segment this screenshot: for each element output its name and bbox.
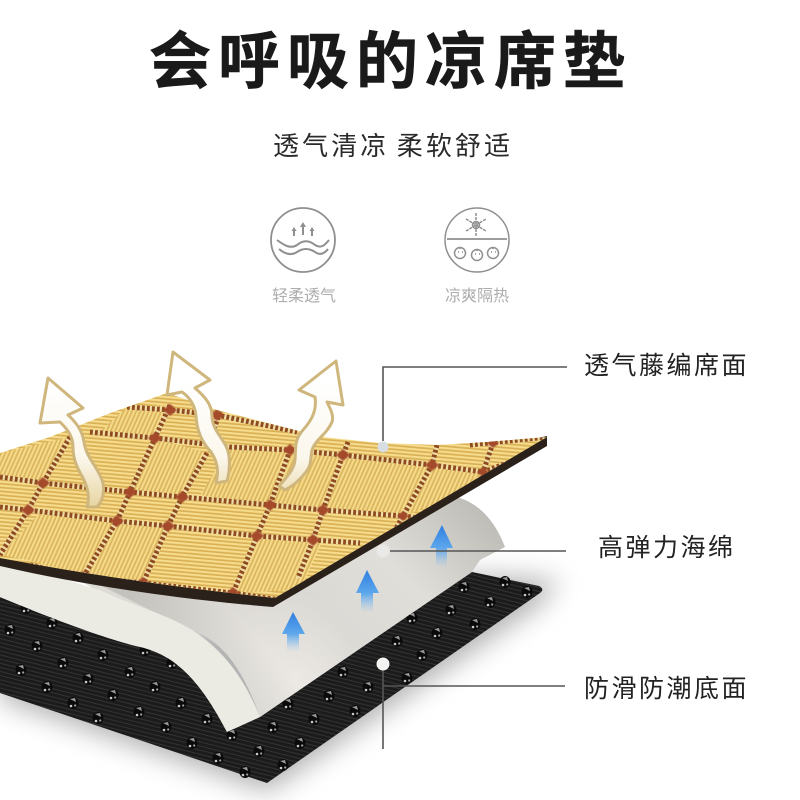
mat edge [0,436,547,607]
mat top surface [0,393,547,598]
blue arrow left [282,612,305,652]
icon label: breathable: 轻柔透气 [272,287,336,305]
callout text: 高弹力海绵 [598,534,736,562]
mat weave patches and plaid [0,404,547,600]
blue arrow right [430,525,453,568]
arrow: heat rising left [40,378,104,507]
arrow: heat rising middle [167,352,229,483]
base fabric [0,572,542,783]
icon label: heat insulation: 凉爽隔热 [445,287,509,305]
layer: anti-slip base [0,572,542,783]
icon: breathable waves [271,208,335,272]
layer: rattan mat [0,393,547,607]
blue arrow middle [356,570,379,613]
callout: foam [376,534,736,562]
shadow under mat [0,575,560,792]
foam body [60,498,505,717]
callout text: 防滑防潮底面 [584,675,749,703]
callout: rattan surface [378,352,749,452]
foam inner shade [100,560,380,717]
foam white edge [0,560,260,732]
base grip dots [4,576,532,778]
arrow: heat rising right [279,361,343,490]
subtitle: 透气清凉 柔软舒适 [273,131,513,161]
callout line [383,664,565,749]
callout dot [376,658,390,670]
callout text: 透气藤编席面 [584,352,749,380]
title: 会呼吸的凉席垫 [149,28,632,97]
layer: foam [0,498,505,732]
callout dot [378,442,388,452]
icon: snowflake cooling [445,208,509,272]
callout dot [376,544,390,558]
callout line [390,550,566,552]
callout: base [376,658,749,749]
callout line [383,367,567,441]
